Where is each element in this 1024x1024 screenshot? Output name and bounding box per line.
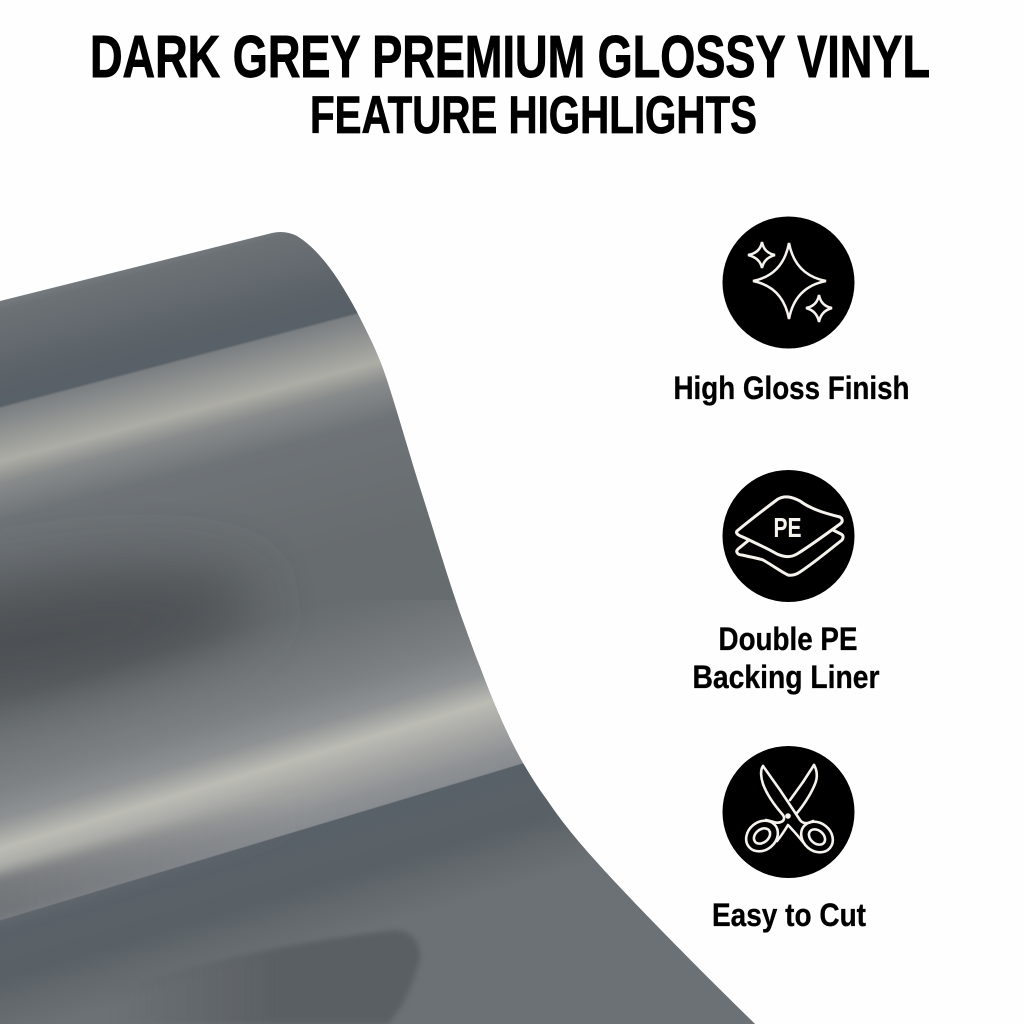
icon: PE layers: [722, 470, 854, 602]
label: double PE backing liner: Backing Liner: [692, 659, 880, 695]
feature: double PE backing liner: [692, 470, 880, 695]
subtitle: FEATURE HIGHLIGHTS: [310, 86, 757, 145]
label: double PE backing liner: [692, 621, 880, 695]
icon: scissors: [722, 746, 854, 878]
icon: sparkles: [722, 216, 854, 348]
vinyl sheet: [0, 232, 755, 1024]
feature: high gloss finish: [674, 216, 910, 406]
feature: easy to cut: [712, 746, 866, 933]
label: high gloss finish: High Gloss Finish: [674, 370, 910, 406]
label: double PE backing liner: Double PE: [718, 621, 858, 657]
label: easy to cut: Easy to Cut: [712, 897, 866, 933]
icon: PE layers: PE: [774, 512, 802, 543]
